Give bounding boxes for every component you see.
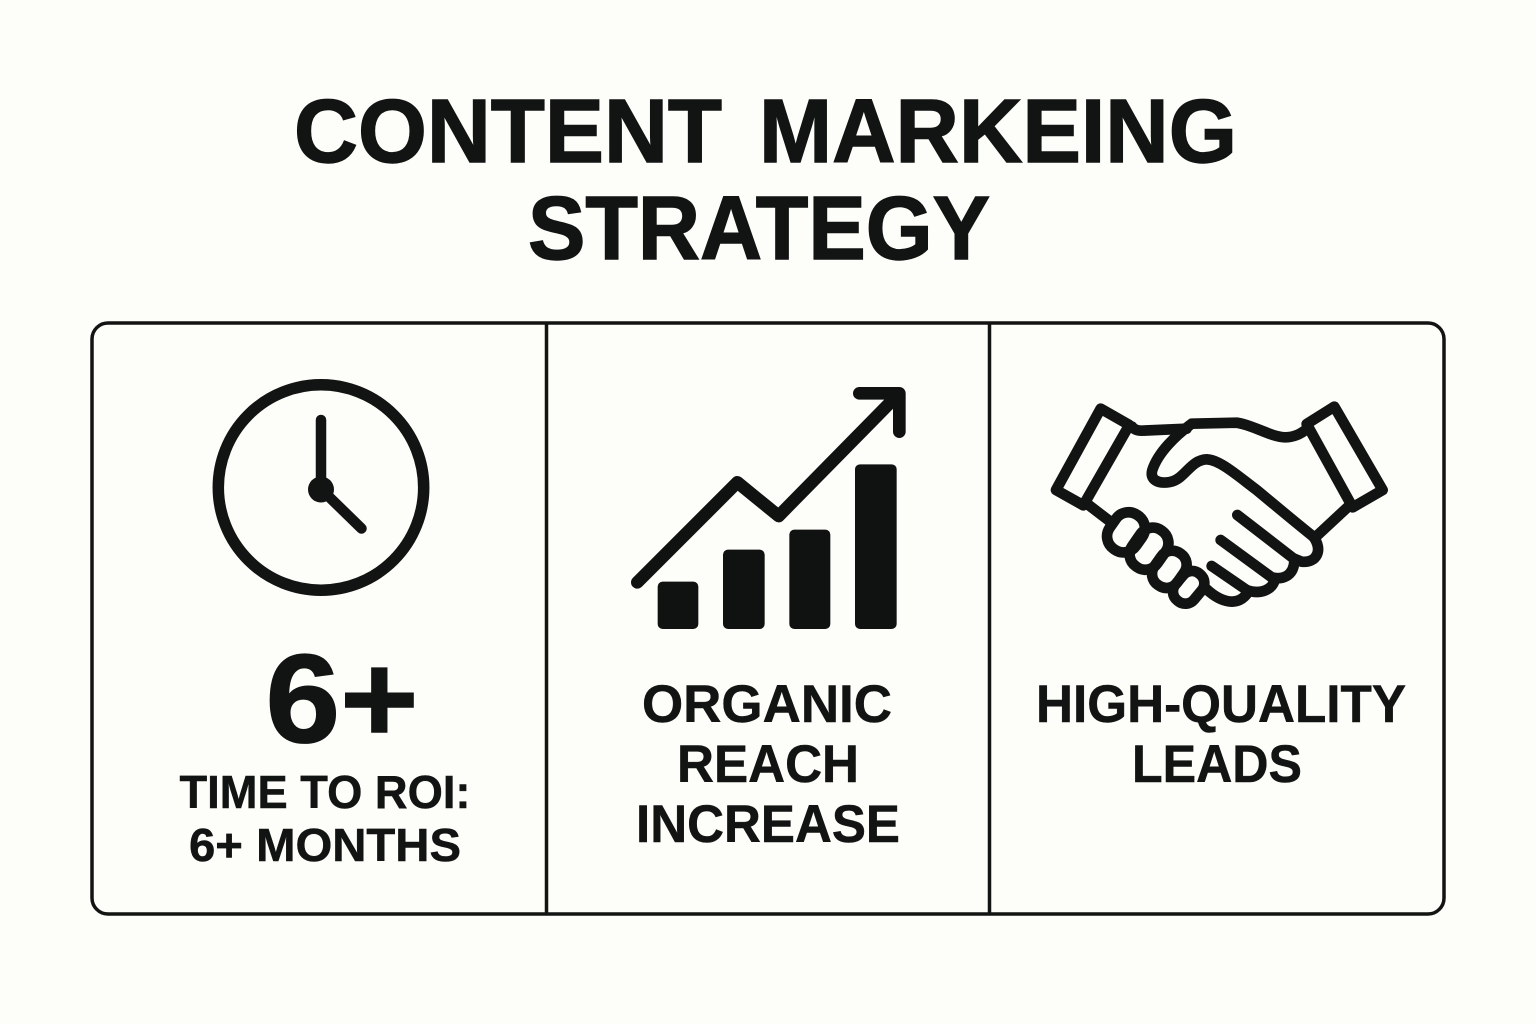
label: organic reach increase: REACH (677, 735, 859, 794)
title: STRATEGY (528, 179, 990, 279)
icon: handshake (1056, 407, 1383, 608)
label: high-quality leads (1036, 675, 1406, 794)
label: organic reach increase: ORGANIC (642, 675, 892, 734)
label: organic reach increase (636, 675, 900, 854)
label: time to ROI (180, 766, 470, 871)
label: high-quality leads: HIGH-QUALITY (1036, 675, 1406, 734)
label: time to ROI: TIME TO ROI: (180, 766, 470, 818)
panel: high-quality leads (1036, 407, 1406, 794)
title (294, 82, 1237, 279)
title: MARKEING (759, 82, 1237, 182)
panel: organic reach (636, 393, 900, 854)
label: organic reach increase: INCREASE (636, 795, 900, 854)
icon: growth chart (637, 393, 899, 629)
bars (658, 464, 897, 629)
label: time to ROI: 6+ MONTHS (189, 819, 461, 871)
title: CONTENT (294, 82, 722, 182)
panel: time to ROI (180, 385, 470, 871)
trend arrow (637, 393, 899, 582)
stat: 6+: 6+ (266, 628, 418, 769)
icon: clock (218, 385, 424, 590)
panel frame (92, 323, 1444, 914)
label: high-quality leads: LEADS (1132, 735, 1302, 794)
